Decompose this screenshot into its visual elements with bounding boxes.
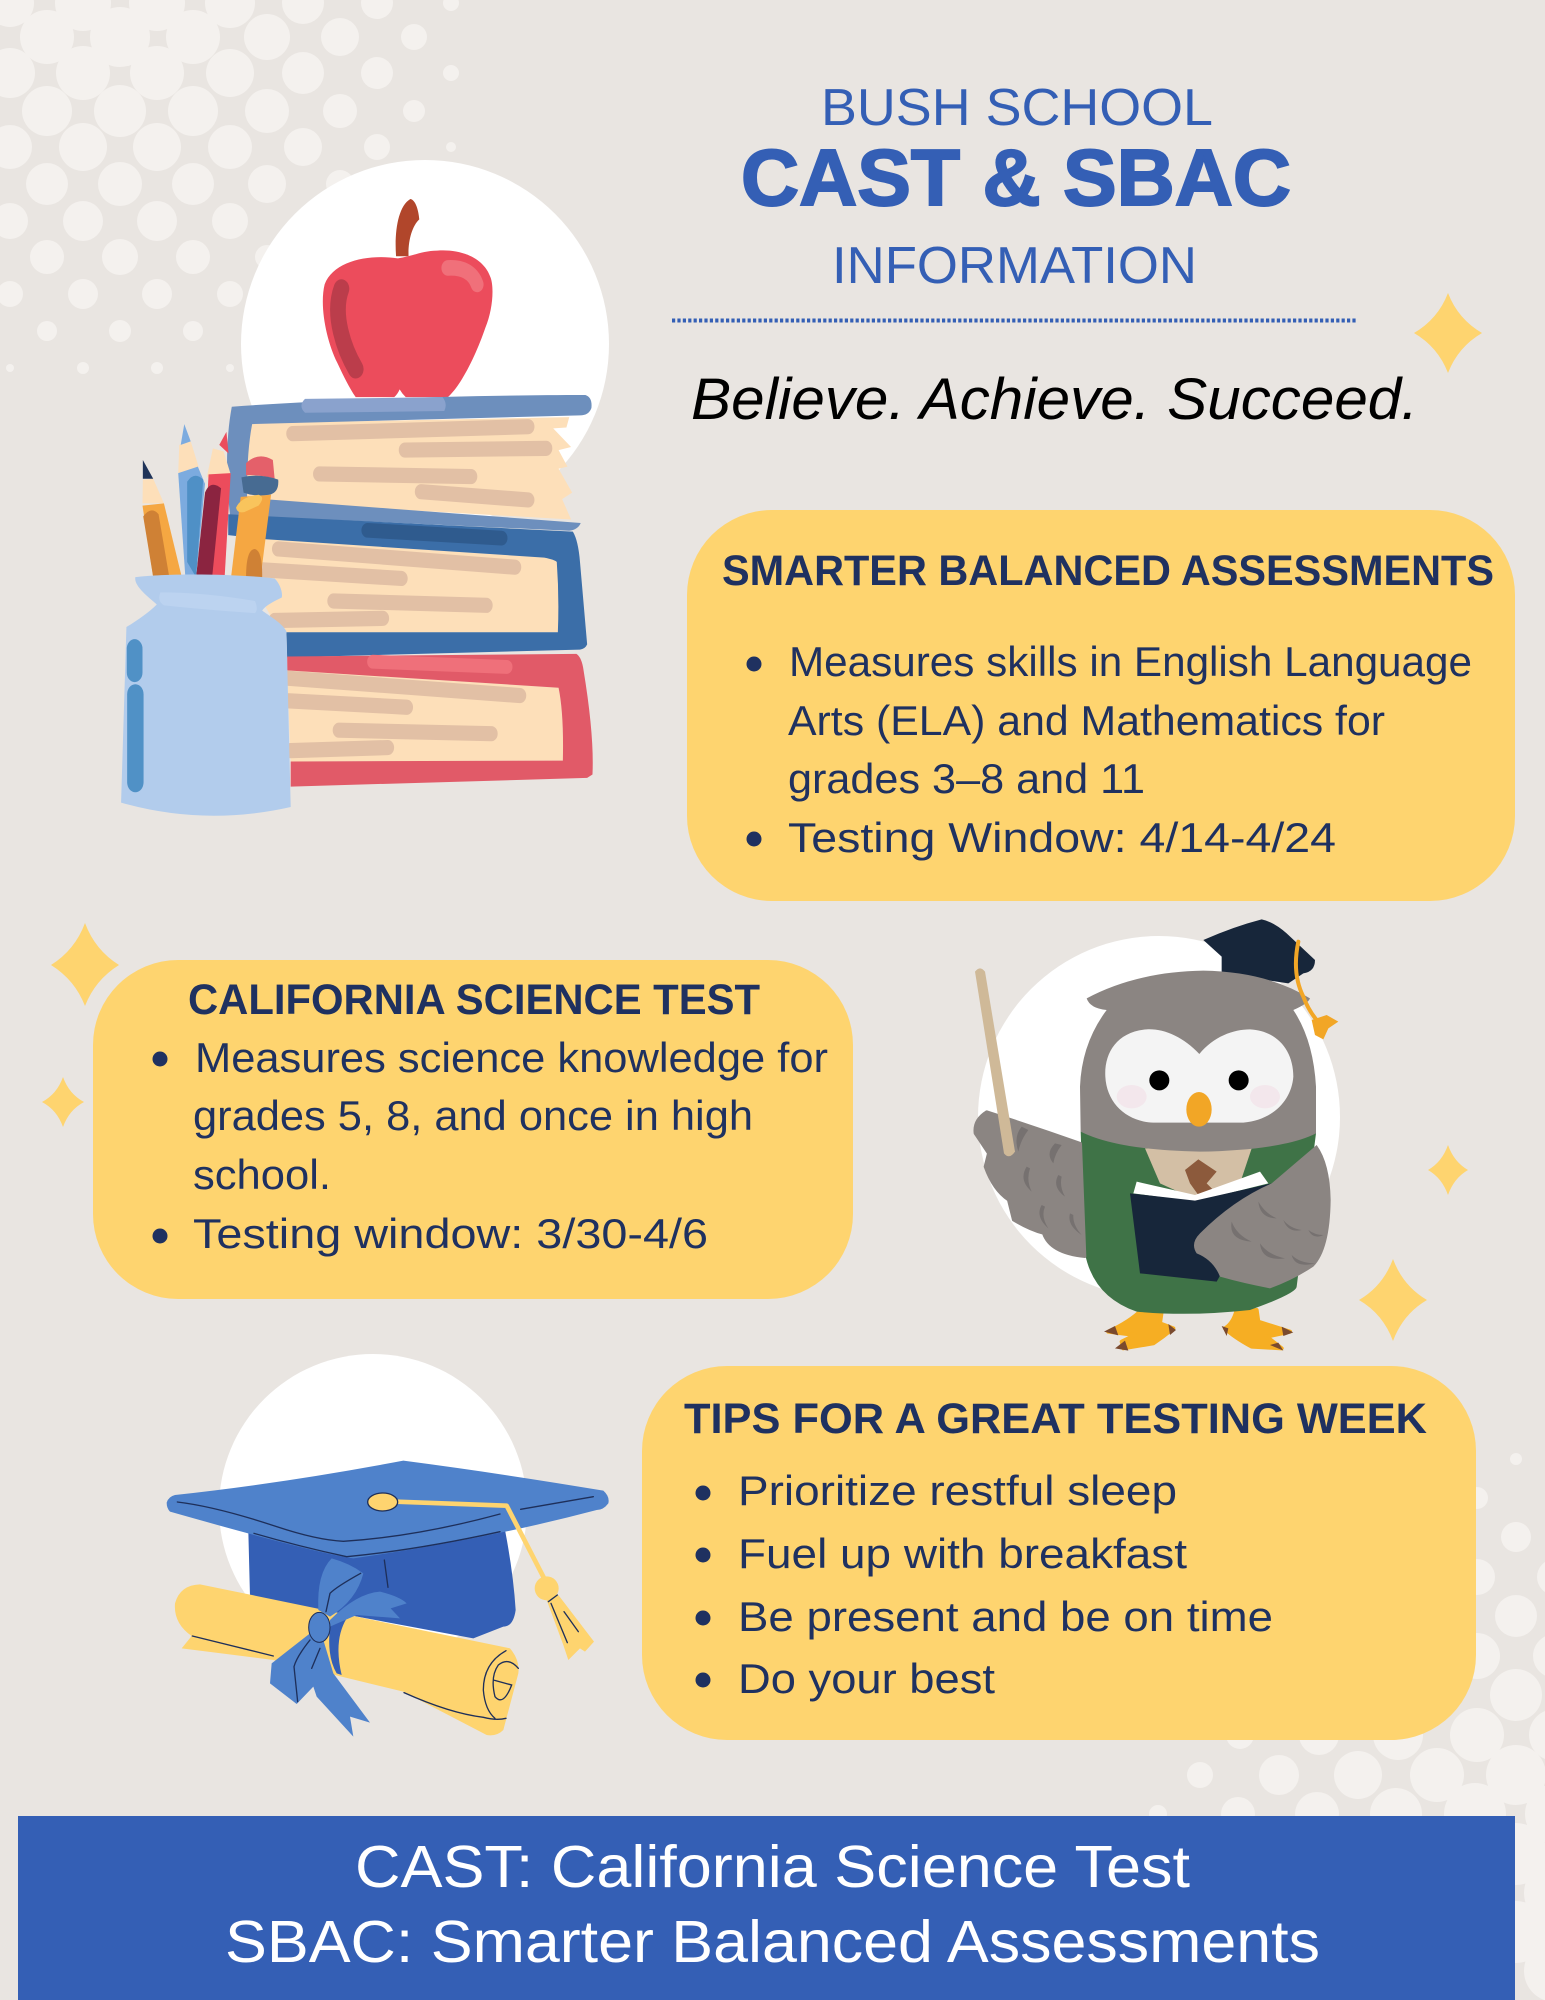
icon: sparkle small right [1428, 1145, 1468, 1195]
icon: sparkle large left [51, 923, 119, 1006]
illustration: white circle behind owl [978, 936, 1340, 1298]
bullet list: Arts (ELA) and Mathematics for [788, 697, 1385, 744]
bullet list: Testing Window: 4/14-4/24 [788, 814, 1336, 861]
acronym line two: SBAC: Smarter Balanced Assessments [225, 1909, 1320, 1975]
bullet list: grades 3–8 and 11 [788, 755, 1145, 802]
bullet list: Measures science knowledge for [195, 1034, 828, 1081]
motto: Believe. Achieve. Succeed. [691, 367, 1418, 432]
top book [227, 395, 592, 531]
illustration: white circle behind books [241, 160, 609, 528]
heading: SMARTER BALANCED ASSESSMENTS [722, 547, 1494, 595]
bullet list [152, 1034, 828, 1257]
bottom book [287, 654, 593, 787]
bullet list: Fuel up with breakfast [738, 1530, 1187, 1577]
bullet list: school. [193, 1151, 331, 1198]
bullet list: Be present and be on time [738, 1593, 1273, 1640]
hat tassel [1296, 942, 1338, 1039]
footer bar: acronym key [18, 1816, 1515, 2000]
information label: INFORMATION [832, 237, 1197, 295]
bullet list: Prioritize restful sleep [738, 1467, 1177, 1514]
folded wing [1194, 1145, 1331, 1288]
illustration: owl teacher [975, 919, 1338, 1351]
cap base [248, 1530, 516, 1638]
bullet list: Testing window: 3/30-4/6 [193, 1210, 708, 1257]
tassel [368, 1493, 594, 1660]
bullet list: Measures skills in English Language [789, 638, 1472, 685]
open book [1130, 1172, 1272, 1282]
owl body [1080, 971, 1316, 1314]
school name: BUSH SCHOOL [821, 79, 1213, 137]
ribbon [270, 1558, 407, 1737]
icon: sparkle top right [1414, 293, 1482, 373]
illustration: graduation cap and diploma [167, 1461, 609, 1737]
illustration: apple, books and pencil jar [121, 199, 593, 816]
middle book [228, 514, 587, 657]
heading: CALIFORNIA SCIENCE TEST [188, 976, 760, 1024]
bullet list [696, 1467, 1273, 1702]
bullet list [746, 638, 1472, 861]
mortarboard [167, 1461, 609, 1587]
bullet list: grades 5, 8, and once in high [193, 1092, 753, 1139]
apple [323, 199, 492, 397]
panel: smarter balanced assessments [687, 510, 1515, 901]
icon: sparkle small left [42, 1077, 84, 1127]
panel: california science test [93, 960, 853, 1299]
heading: TIPS FOR A GREAT TESTING WEEK [684, 1395, 1427, 1443]
panel: tips for a great testing week [642, 1366, 1476, 1740]
pencils [142, 424, 278, 579]
title block [741, 79, 1291, 295]
owl face [1105, 1029, 1293, 1127]
pencil jar [121, 574, 291, 816]
owl hat [1203, 919, 1315, 983]
pointer stick and raised wing [975, 968, 1085, 1257]
diploma scroll [175, 1584, 519, 1735]
acronym line one: CAST: California Science Test [355, 1834, 1190, 1900]
main heading: CAST & SBAC [741, 133, 1291, 222]
bullet list: Do your best [738, 1655, 995, 1702]
owl feet [1104, 1310, 1293, 1351]
illustration: white circle behind cap [219, 1354, 527, 1662]
icon: sparkle large right [1359, 1259, 1427, 1341]
